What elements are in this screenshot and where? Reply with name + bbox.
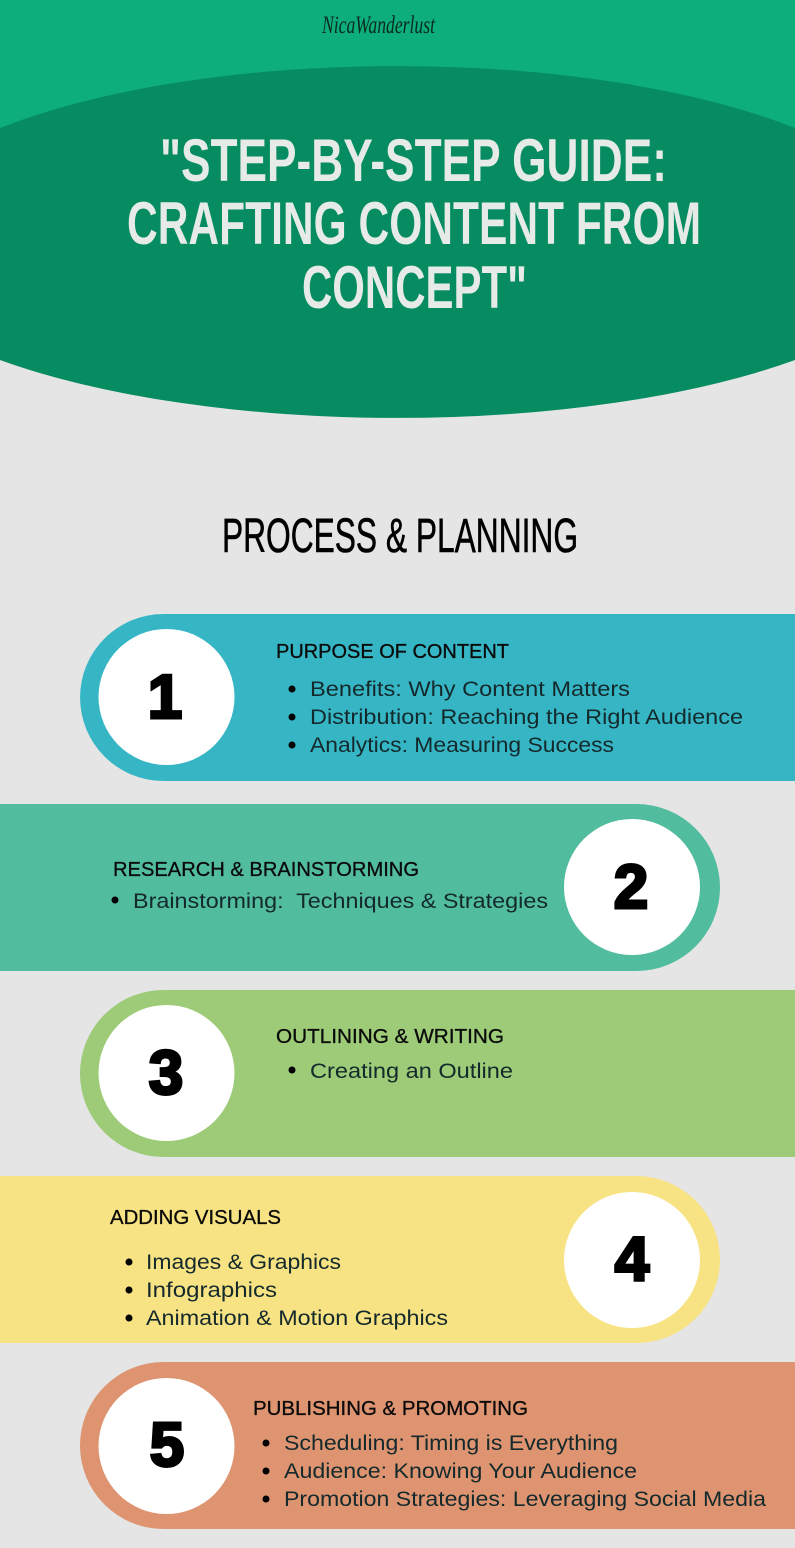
panel: step 1 <box>80 614 795 781</box>
step 2 list: Brainstorming: Techniques & Strategies <box>133 890 548 913</box>
step 2 heading: RESEARCH & BRAINSTORMING <box>113 859 419 881</box>
step 1 number badge <box>98 629 234 765</box>
step 4 number badge: 4 <box>615 1225 650 1294</box>
panel: step 5 <box>80 1362 795 1529</box>
step 5 heading: PUBLISHING & PROMOTING <box>253 1398 528 1420</box>
title: CONCEPT" <box>302 254 527 321</box>
section heading: PROCESS & PLANNING <box>222 510 578 563</box>
step 1 list <box>288 678 743 757</box>
step 4 list: Infographics <box>146 1279 277 1302</box>
step 1 list: Distribution: Reaching the Right Audience <box>310 706 743 729</box>
step 4 list: Animation & Motion Graphics <box>146 1307 448 1330</box>
step 3 heading: OUTLINING & WRITING <box>276 1026 504 1048</box>
step 3 number badge: 3 <box>149 1039 183 1108</box>
step 3 number badge <box>98 1005 234 1141</box>
step 4 list <box>126 1251 448 1330</box>
step 5 number badge: 5 <box>150 1411 184 1480</box>
step 5 number badge <box>98 1378 234 1514</box>
step 2 number badge <box>564 819 700 955</box>
panel: step 2 <box>0 804 720 971</box>
step 4 list: Images & Graphics <box>146 1251 341 1274</box>
step 5 list: Scheduling: Timing is Everything <box>284 1432 618 1455</box>
header: green band and ellipse <box>0 0 795 418</box>
step 1 heading: PURPOSE OF CONTENT <box>276 641 509 663</box>
step 1 list: Benefits: Why Content Matters <box>310 678 630 701</box>
step 4 heading: ADDING VISUALS <box>110 1207 281 1229</box>
step 1 number badge: 1 <box>148 663 182 732</box>
step 2 number badge: 2 <box>614 853 648 922</box>
step 5 list: Promotion Strategies: Leveraging Social Media <box>284 1488 766 1511</box>
panel: step 4 <box>0 1176 720 1343</box>
title <box>127 127 701 321</box>
step 5 list: Audience: Knowing Your Audience <box>284 1460 637 1483</box>
logo signature: NicaWanderlust <box>321 12 436 39</box>
step 1 list: Analytics: Measuring Success <box>310 734 614 757</box>
step 4 number badge <box>564 1192 700 1328</box>
panel: step 3 <box>80 990 795 1157</box>
step 3 list: Creating an Outline <box>310 1060 513 1083</box>
step 5 list <box>262 1432 766 1511</box>
